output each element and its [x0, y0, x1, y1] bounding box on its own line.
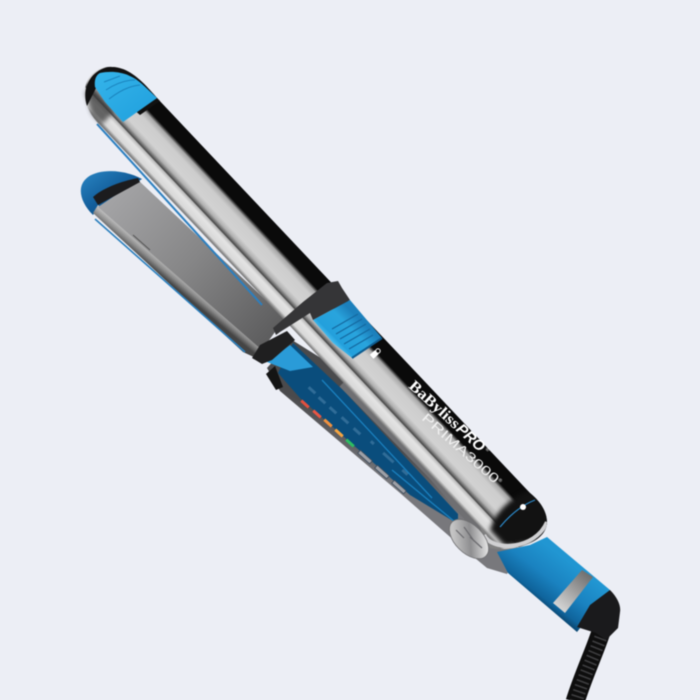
lower body shell: [267, 340, 520, 574]
lock icon: [370, 349, 380, 359]
model name: ®: [496, 476, 504, 484]
model name: [419, 410, 505, 489]
panel bright blue piece: [267, 345, 313, 371]
slider ridges: [332, 314, 373, 349]
lower arm: blue edge line: [95, 219, 245, 352]
model name: PRIMA3000: [419, 410, 502, 486]
emblem marks: [456, 527, 482, 548]
black side nub: [266, 366, 283, 390]
flat iron illustration: [80, 66, 621, 700]
lower arm: blue tip: [81, 171, 142, 215]
tip shading: [85, 88, 114, 124]
hinge emblem: [442, 512, 496, 566]
lower black hinge clip: [252, 331, 295, 364]
straightener: [81, 67, 620, 700]
neck: [497, 537, 610, 632]
white highlight: [520, 504, 526, 510]
control buttons: [358, 450, 406, 494]
plate black strip: [93, 178, 140, 205]
panel highlight lines: [322, 380, 455, 522]
plate ridge mark: [133, 235, 150, 250]
power cord: [575, 622, 604, 700]
black clip band: [273, 281, 350, 335]
upper arm blue edge line: [97, 124, 262, 305]
black tip: [85, 67, 160, 115]
brand name: ®: [484, 446, 491, 453]
silver ring: [553, 570, 593, 613]
brand name: [405, 377, 493, 459]
black cord boot: [577, 590, 620, 640]
slider shadow edge: [352, 338, 382, 358]
temperature indicator LEDs: [300, 400, 355, 447]
lower arm: silver edge: [93, 205, 266, 358]
end cap dome: [484, 496, 548, 549]
panel faint labels: [308, 386, 409, 476]
upper arm lower gray trim: [342, 384, 480, 532]
upper chrome arm: [85, 67, 547, 549]
cap grip lines: [104, 76, 140, 99]
blue slider switch: [313, 300, 382, 358]
brand name: PRO: [453, 421, 489, 456]
blue cap: [95, 72, 157, 122]
heat plate: [98, 180, 285, 350]
chrome rim: [484, 522, 547, 546]
blue reflection: [500, 500, 535, 527]
brand name: BaByliss: [405, 377, 463, 432]
control panel: [267, 343, 458, 524]
